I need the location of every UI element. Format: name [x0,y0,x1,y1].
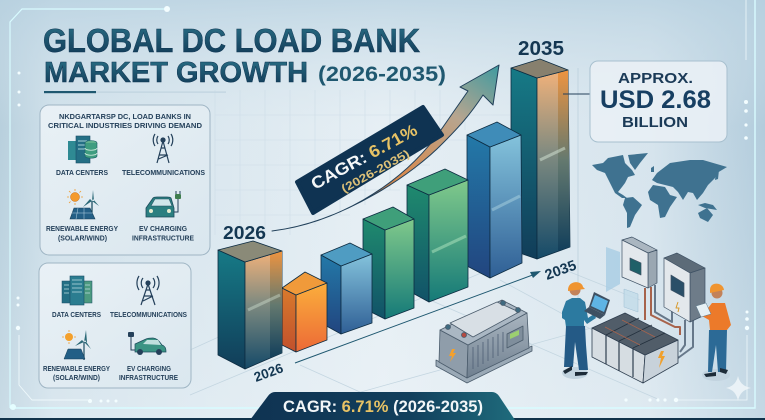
bar 2031 [321,243,372,334]
technician with laptop [562,282,610,379]
callout: market value: BILLION [622,114,688,131]
label: renewable energy: (SOLAR/WIND) [53,375,100,382]
icon: solar and wind [67,189,99,219]
bar 2027 [282,272,327,352]
label: EV charging: INFRASTRUCTURE [132,234,194,242]
panel heading [48,114,202,130]
label: EV charging: INFRASTRUCTURE [119,375,178,382]
time axis arrow [252,258,579,385]
inverter left [622,237,657,288]
panel: industries bottom [39,263,191,388]
inverter right [664,253,705,322]
bar 2026 [218,241,282,369]
panel heading: NKDGARTARSP DC, LOAD BANKS IN [59,114,191,121]
title: MARKET GROWTH [44,57,308,89]
bar 2035 [511,59,570,259]
technician with clipboard [696,284,731,381]
label: data centers: DATA CENTERS [52,312,101,319]
icon: solar and wind [62,330,91,360]
time axis arrow: 2035 [543,258,579,284]
callout: market value: APPROX. [618,70,693,87]
label: 2026: 2026 [223,223,266,243]
label: EV charging: EV CHARGING [127,366,171,373]
footer band [0,392,765,420]
panel: industries top [40,105,210,255]
growth arrow [272,65,499,231]
bar 2034 [467,122,522,278]
callout: CAGR label: CAGR: 6.71% [308,121,421,194]
label: telecommunications: TELECOMMUNICATIONS [122,168,205,177]
bar chart [218,59,570,369]
label: renewable energy [46,224,118,242]
icon: telecom tower [153,134,173,163]
icon: sparkle [726,376,751,401]
label: renewable energy [43,366,110,382]
panel heading: CRITICAL INDUSTRIES DRIVING DEMAND [48,123,202,130]
callout: CAGR label: (2026-2035) [340,148,412,196]
label: 2035: 2035 [518,37,564,60]
icon: EV car [128,332,166,355]
title [43,22,446,93]
time axis arrow: 2026 [252,360,286,385]
label: EV charging [119,366,178,382]
title: GLOBAL DC LOAD BANK [43,22,420,59]
icon: data center [68,136,97,163]
label: renewable energy: (SOLAR/WIND) [58,234,108,242]
label: renewable energy: RENEWABLE ENERGY [43,366,110,373]
label: renewable energy: RENEWABLE ENERGY [46,224,118,233]
equipment: inverters and battery bank [592,237,705,383]
icon: servers [62,276,92,305]
icon: EV car [146,191,181,217]
floating documents [606,247,638,312]
footer band: CAGR: 6.71% (2026-2035) [283,398,483,416]
label: telecommunications: TELECOMMUNICATIONS [110,312,187,319]
callout: market value: USD 2.68 [600,86,711,114]
title: (2026-2035) [318,63,446,86]
bar 2032 [363,207,414,319]
callout: market value [563,61,727,142]
bar 2033 [407,169,468,302]
icon: tower [137,276,159,305]
battery bank [592,313,678,383]
world map [592,153,727,228]
label: data centers: DATA CENTERS [56,168,108,177]
label: EV charging [132,224,194,242]
label: EV charging: EV CHARGING [139,224,187,233]
callout: CAGR label [297,107,442,213]
battery [436,300,532,383]
